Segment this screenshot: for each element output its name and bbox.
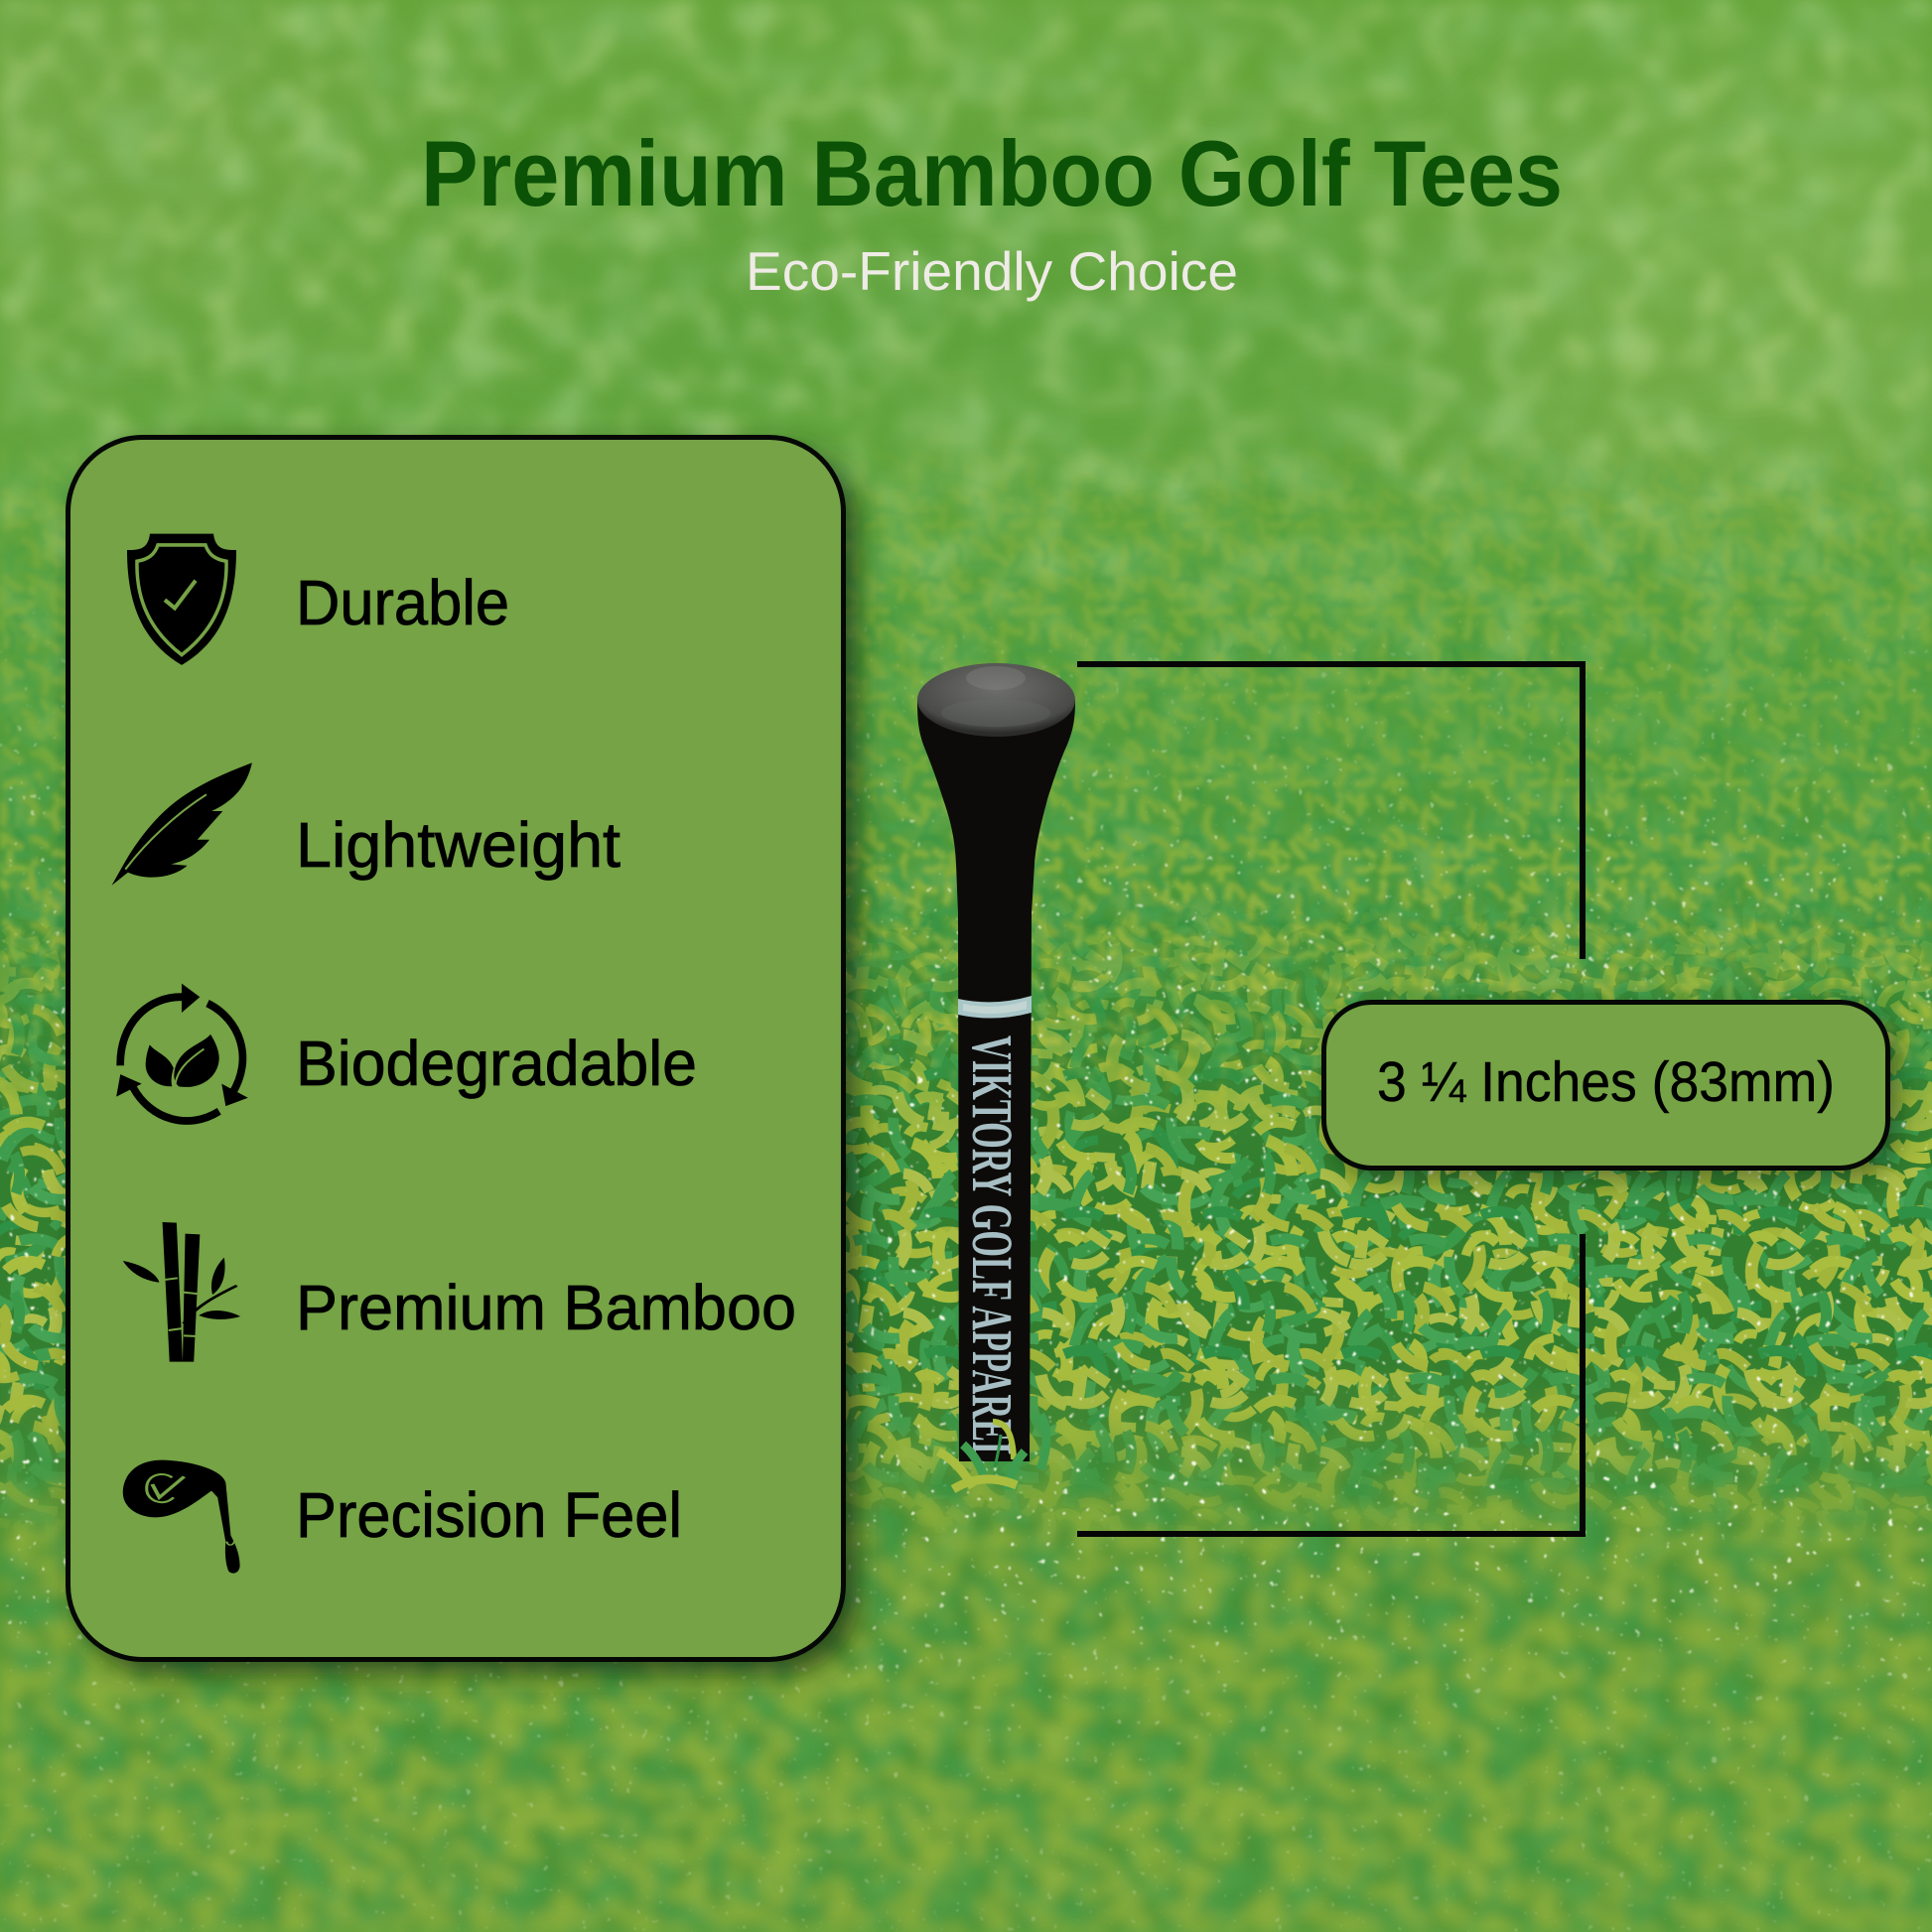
icon: feather <box>112 762 252 886</box>
golf tee <box>917 663 1075 1489</box>
bracket: lower dimension line <box>1077 1234 1583 1534</box>
label: biodegradable: Biodegradable <box>296 1028 697 1099</box>
label: precision feel: Precision Feel <box>296 1479 682 1551</box>
panel shadow <box>79 449 858 1674</box>
subtitle: Eco-Friendly Choice <box>746 240 1238 302</box>
bracket: upper dimension line <box>1077 664 1583 959</box>
title: Premium Bamboo Golf Tees <box>421 121 1563 225</box>
icon: recycling leaves <box>116 984 248 1121</box>
callout text: 3 ¼ Inches (83mm) <box>1377 1050 1835 1114</box>
icon: bamboo <box>123 1222 240 1362</box>
callout: tee length <box>1324 1003 1899 1179</box>
label: durable: Durable <box>296 567 509 638</box>
label: premium bamboo: Premium Bamboo <box>296 1272 796 1343</box>
icon: golf club with check <box>123 1460 240 1574</box>
tee imprint text: VIKTORY GOLF APPAREL <box>960 1035 1025 1464</box>
grass blades over tee base <box>938 1415 1046 1489</box>
label: lightweight: Lightweight <box>296 809 621 881</box>
icon: shield with check <box>127 534 236 665</box>
panel: features <box>68 437 858 1674</box>
panel background <box>68 437 844 1660</box>
